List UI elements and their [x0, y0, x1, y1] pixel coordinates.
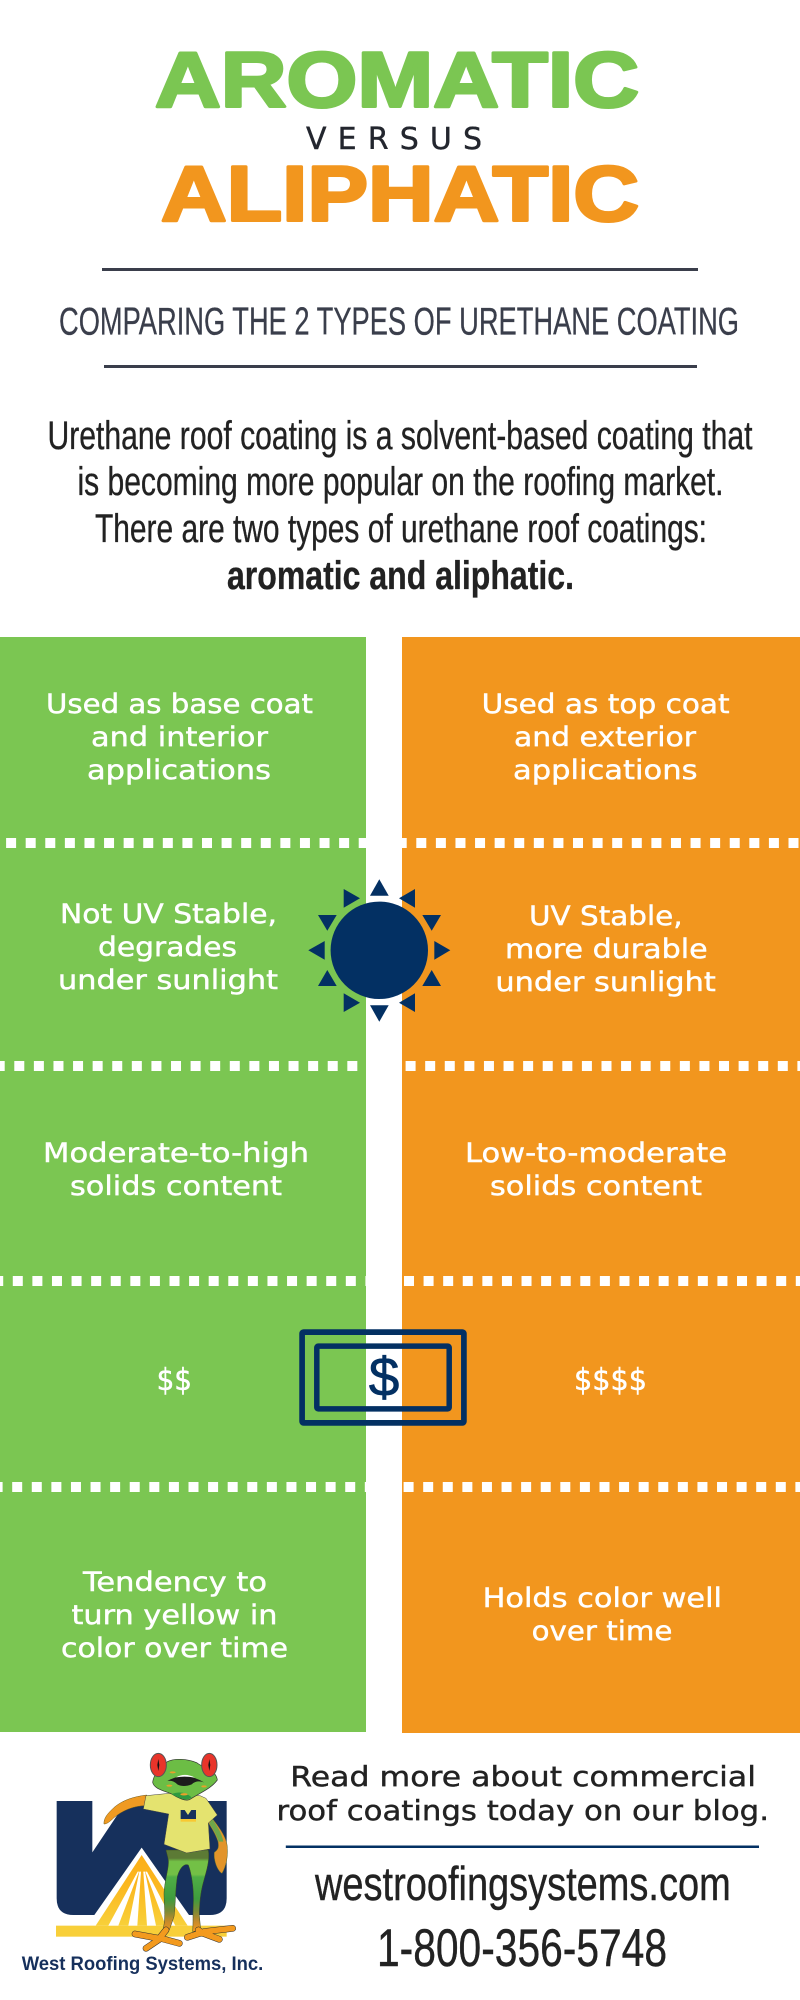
title: versus: VERSUS [306, 122, 482, 157]
aliphatic: color: over time [532, 1616, 672, 1647]
aliphatic: cost: $$$$ [574, 1363, 647, 1398]
aromatic: color: Tendency to [82, 1567, 267, 1598]
aliphatic: color: Holds color well [483, 1583, 722, 1614]
aliphatic: use [482, 689, 730, 786]
aliphatic: UV stability: under sunlight [495, 967, 716, 998]
aromatic: color: turn yellow in [72, 1600, 278, 1631]
footer: blog call to action: Read more about commercial [290, 1760, 756, 1793]
aromatic: UV stability: under sunlight [58, 965, 278, 996]
aromatic: cost: $$ [157, 1363, 192, 1398]
intro paragraph [48, 414, 752, 598]
aromatic: color: color over time [61, 1633, 288, 1664]
logo: West Roofing Systems [22, 1753, 263, 1975]
title [155, 36, 639, 238]
logo text: West Roofing Systems, Inc. [22, 1953, 263, 1975]
footer: blog call to action [276, 1760, 769, 1827]
footer: blog call to action: roof coatings today on our blog. [276, 1794, 769, 1827]
aromatic: color [61, 1567, 288, 1664]
aliphatic: color [483, 1583, 722, 1647]
aromatic: solids content [43, 1138, 309, 1202]
aliphatic: solids content [465, 1138, 727, 1202]
logo mark [56, 1801, 227, 1937]
aliphatic: solids content: Low-to-moderate [465, 1138, 727, 1169]
aliphatic: use: Used as top coat [482, 689, 730, 720]
title: aliphatic: ALIPHATIC [161, 150, 639, 238]
aromatic: use: and interior [91, 722, 269, 753]
aromatic: use: Used as base coat [46, 689, 313, 720]
aromatic: use: applications [87, 755, 271, 786]
aliphatic: use: applications [513, 755, 698, 786]
aromatic: UV stability: degrades [98, 932, 237, 963]
icon: dollar bill [302, 1332, 464, 1423]
aliphatic: UV stability: UV Stable, [529, 901, 683, 932]
title: aromatic: AROMATIC [155, 36, 639, 124]
aliphatic: use: and exterior [514, 722, 697, 753]
icon: frog mascot [104, 1753, 233, 1948]
icon: sun [308, 879, 450, 1022]
aromatic: use [46, 689, 313, 786]
panel: aliphatic column [384, 637, 800, 1733]
panel: aromatic column [0, 637, 366, 1732]
aliphatic: UV stability: more durable [505, 934, 708, 965]
intro paragraph: aromatic and aliphatic. [227, 554, 574, 598]
aromatic: solids content: solids content [70, 1171, 282, 1202]
icon: dollar bill: $ [369, 1346, 399, 1408]
aromatic: UV stability: Not UV Stable, [60, 899, 277, 930]
footer: phone: 1-800-356-5748 [377, 1919, 667, 1978]
aliphatic: solids content: solids content [490, 1171, 702, 1202]
aromatic: UV stability [58, 899, 278, 996]
aromatic: solids content: Moderate-to-high [43, 1138, 309, 1169]
aliphatic: UV stability [495, 901, 716, 998]
